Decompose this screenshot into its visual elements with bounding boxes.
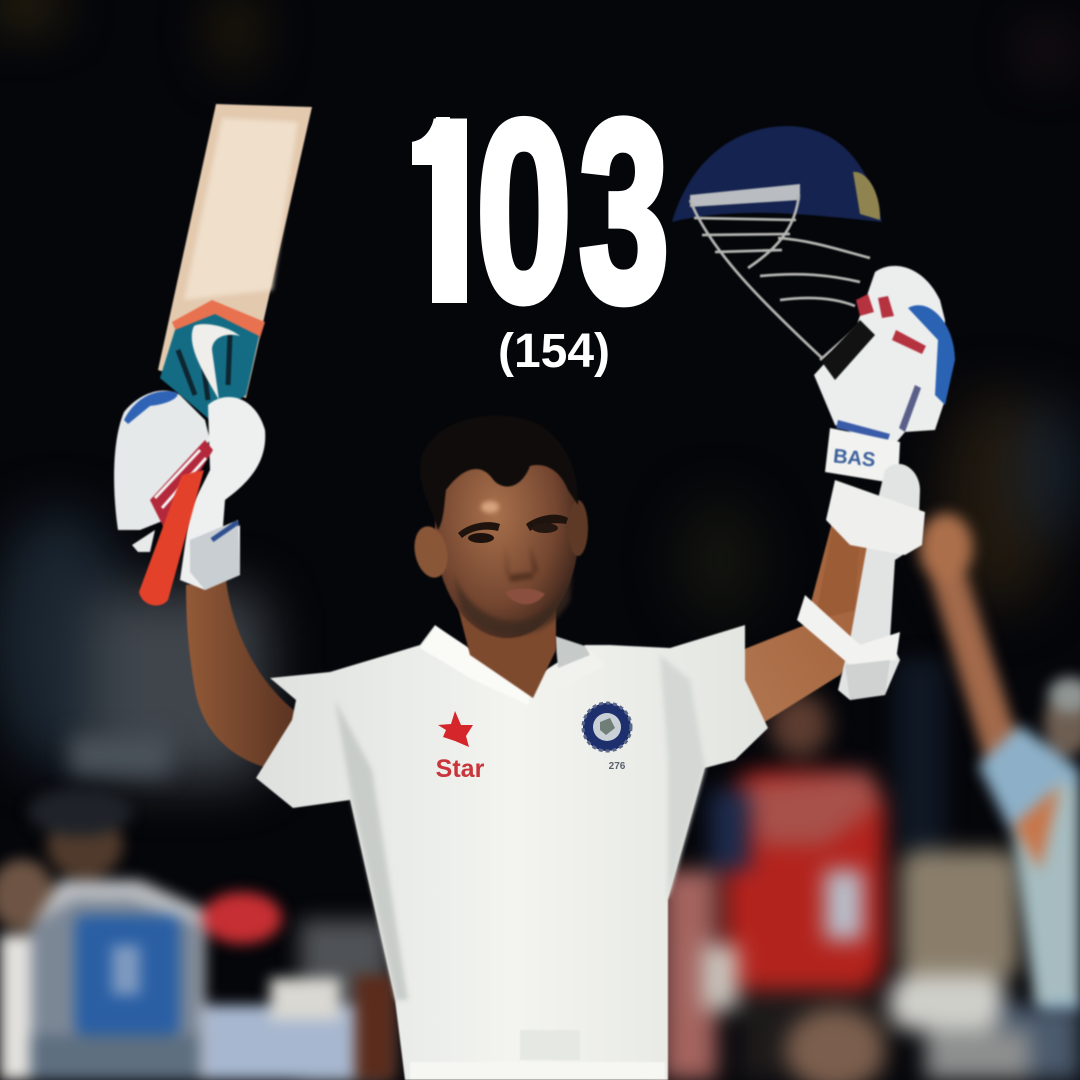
stubble — [452, 570, 572, 635]
score: 103 — [412, 115, 666, 308]
helmet dome — [672, 126, 882, 222]
background figure: spectator with raised arm — [919, 513, 1080, 1010]
score: 103: 3 — [579, 67, 669, 355]
glove wrist strap BAS — [825, 428, 900, 484]
left batting glove — [114, 390, 265, 590]
mouth — [505, 588, 545, 604]
score: 103: 0 — [476, 66, 572, 355]
balls faced: (154): (154) — [498, 325, 610, 378]
ear right — [568, 500, 588, 556]
background figure: steward in blue vest — [0, 788, 395, 1080]
nose shadow — [505, 545, 538, 582]
batsman: white shirt — [256, 625, 768, 1080]
shirt badge: BCCI crest — [583, 703, 631, 772]
helmet grille — [690, 195, 905, 378]
batsman: neck — [456, 600, 556, 698]
batsman: head and face — [410, 416, 588, 638]
bat handle red grip — [139, 470, 204, 606]
ear left — [410, 523, 452, 581]
right batting glove: BAS — [832, 445, 876, 472]
cricket bat — [158, 104, 312, 420]
forehead highlight — [481, 501, 499, 513]
batsman: left arm raised — [186, 580, 296, 772]
hair — [420, 416, 578, 530]
shirt badge: BCCI crest: 276 — [609, 761, 626, 772]
shirt logo: Star: Star — [436, 755, 485, 783]
eyes — [468, 533, 494, 543]
bat sticker teal — [160, 314, 259, 420]
nike swoosh — [192, 324, 240, 400]
bat sticker orange band — [172, 300, 265, 338]
shirt logo: Star — [436, 711, 485, 783]
arm guard — [797, 464, 925, 700]
right batting glove — [814, 266, 955, 484]
visor bar — [690, 184, 800, 207]
batsman: right arm raised — [742, 500, 875, 725]
helmet — [672, 126, 905, 378]
eyebrows — [458, 522, 500, 538]
bat blade — [158, 104, 312, 398]
score: 103: 1 — [372, 67, 516, 356]
